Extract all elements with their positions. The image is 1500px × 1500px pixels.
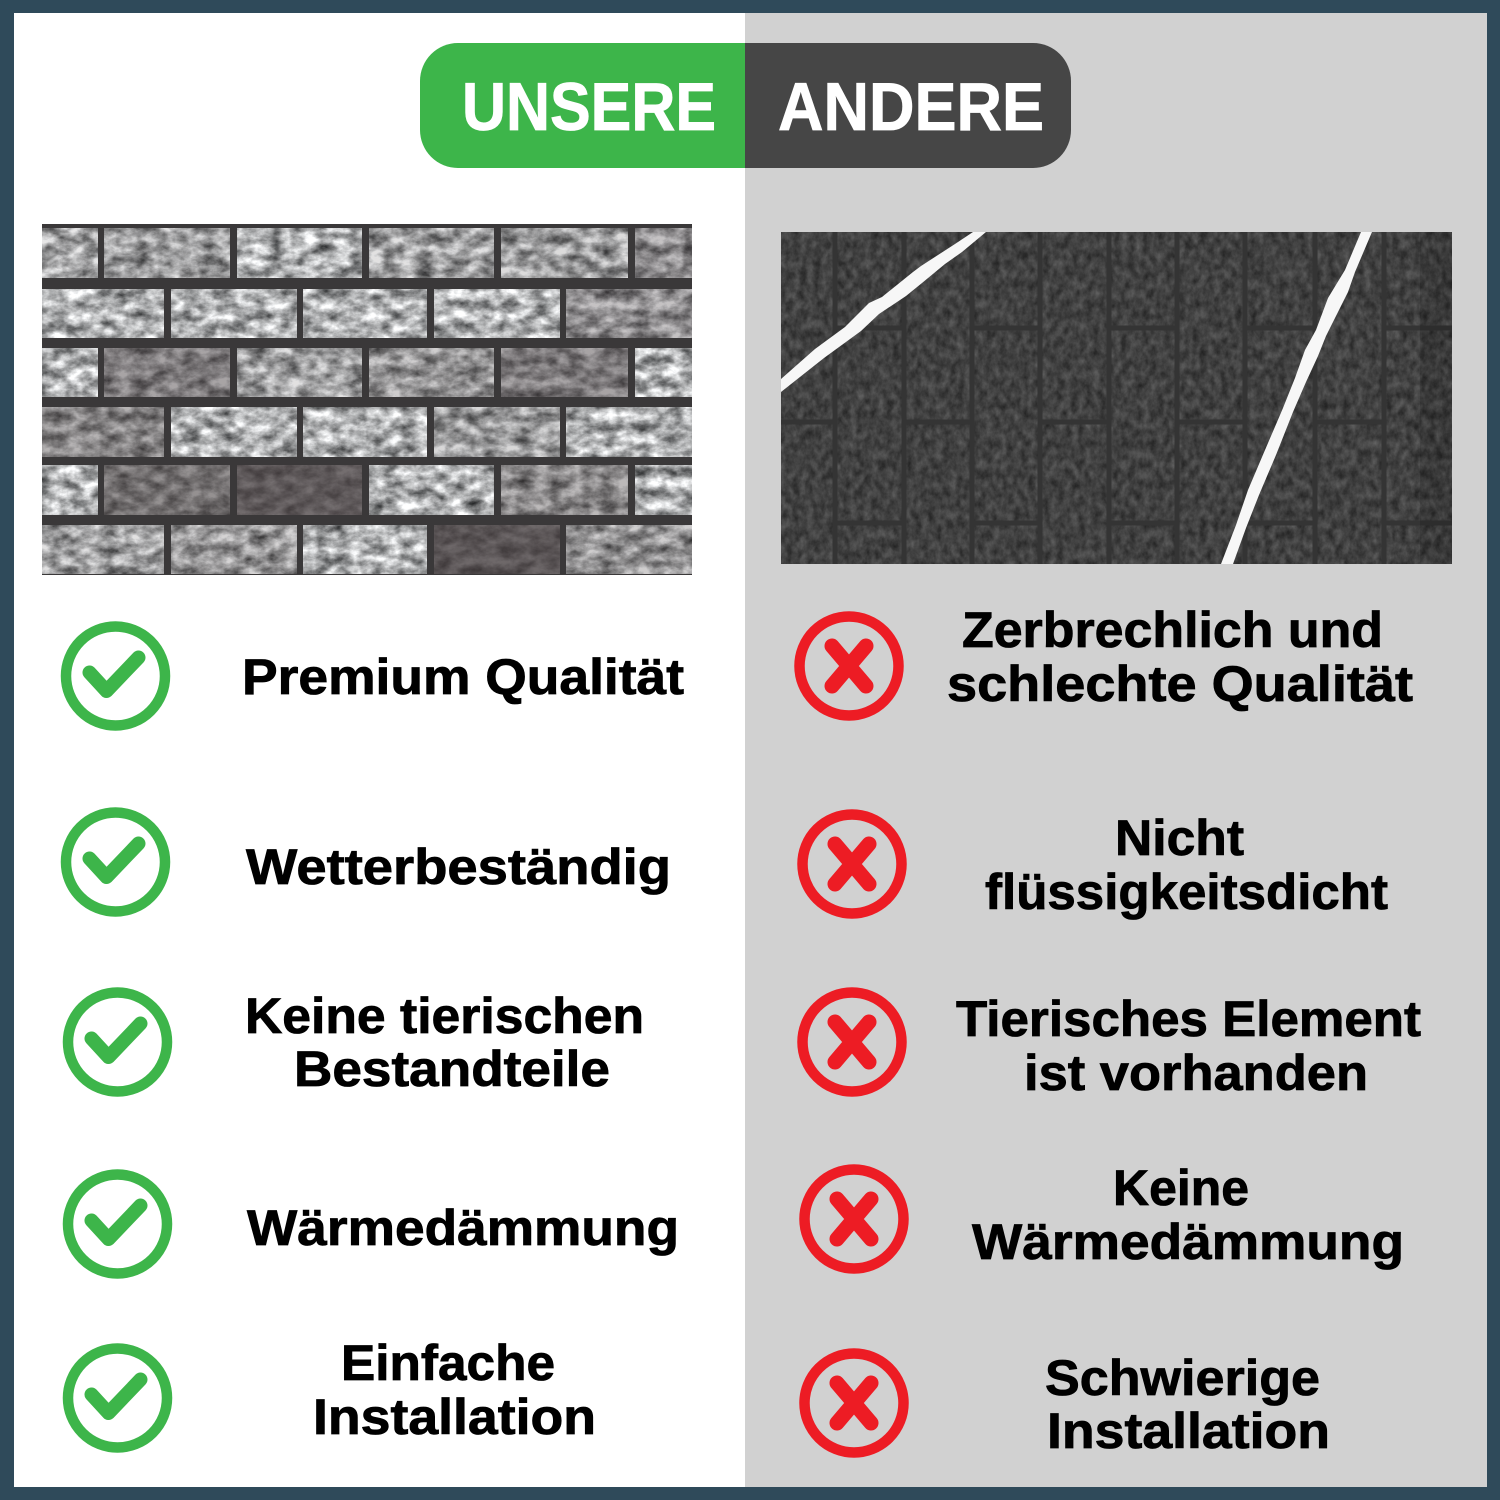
row 1 icon: cross	[800, 616, 898, 716]
row 4 text: andere: Wärmedämmung	[972, 1214, 1404, 1270]
row 1 icon: check	[66, 626, 165, 726]
row 4 icon: cross	[804, 1170, 904, 1268]
row 5 text: andere: Installation	[1047, 1403, 1330, 1459]
header: unsere: UNSERE	[462, 69, 716, 145]
row 5 icon: check	[68, 1348, 167, 1448]
row 1 text: unsere: Premium Qualität	[242, 649, 684, 705]
row 3 text: andere: ist vorhanden	[1024, 1045, 1368, 1101]
header pill	[420, 43, 1071, 168]
header: andere: ANDERE	[778, 69, 1044, 145]
row 3 text: unsere: Bestandteile	[294, 1041, 610, 1097]
photo: cracked dark panel	[781, 232, 1452, 564]
crack left	[781, 232, 986, 392]
row 5 icon: cross	[804, 1354, 904, 1452]
row 5 text: unsere	[313, 1335, 596, 1445]
row 4 text: unsere: Wärmedämmung	[247, 1200, 679, 1256]
crack right	[1221, 232, 1372, 564]
photo: intact grey brick panel	[42, 224, 692, 575]
row 1 text: andere: Zerbrechlich und	[962, 602, 1383, 658]
row 5 text: unsere: Einfache	[341, 1335, 555, 1391]
row 3 icon: cross	[802, 992, 902, 1092]
header: unsere	[420, 43, 745, 168]
row 4 text: andere: Keine	[1113, 1160, 1249, 1216]
panel: andere	[745, 13, 1487, 1487]
row 2 text: andere	[985, 810, 1388, 920]
header: andere	[745, 43, 1071, 168]
row 4 text: andere	[972, 1160, 1404, 1270]
row 2 text: unsere: Wetterbeständig	[246, 839, 671, 895]
row 3 text: unsere: Keine tierischen	[245, 988, 644, 1044]
row 5 text: unsere: Installation	[313, 1389, 596, 1445]
row 1 text: andere	[947, 602, 1413, 712]
row 2 text: andere: Nicht	[1115, 810, 1244, 866]
row 4 icon: check	[68, 1174, 167, 1274]
row 5 text: andere: Schwierige	[1045, 1350, 1320, 1406]
row 2 text: andere: flüssigkeitsdicht	[985, 864, 1388, 920]
row 2 icon: cross	[802, 814, 902, 914]
row 5 text: andere	[1045, 1350, 1330, 1459]
row 1 text: andere: schlechte Qualität	[947, 656, 1413, 712]
row 2 icon: check	[66, 812, 165, 912]
row 3 text: andere: Tierisches Element	[956, 991, 1421, 1047]
row 3 text: unsere	[245, 988, 644, 1097]
panel: unsere	[14, 13, 745, 1487]
row 3 icon: check	[68, 992, 167, 1092]
row 3 text: andere	[956, 991, 1421, 1101]
